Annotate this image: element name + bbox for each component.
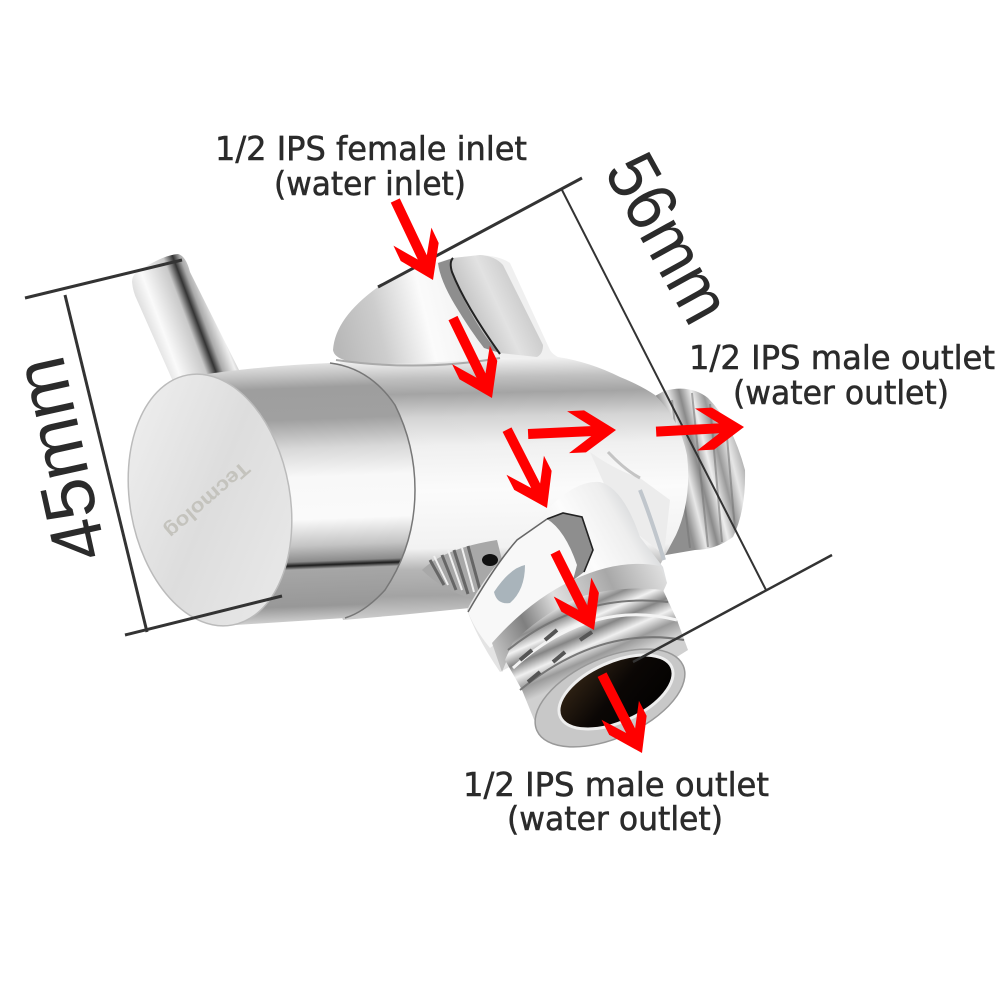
arrow: lower outlet: [583, 665, 661, 763]
arrow: right outlet: [655, 406, 745, 453]
icon: rear small thread: [422, 540, 505, 600]
label: 45mm: 45mm: [0, 349, 123, 570]
label: right outlet: 1/2 IPS male outlet: [689, 338, 995, 377]
label: right outlet: [689, 338, 995, 412]
label: inlet: (water inlet): [274, 164, 466, 203]
arrow: toward right outlet: [527, 409, 617, 455]
label: lower outlet: 1/2 IPS male outlet: [463, 765, 769, 804]
icon: lower outlet thread: [505, 589, 688, 722]
label: inlet: 1/2 IPS female inlet: [215, 129, 527, 168]
icon: lower outlet neck: [467, 482, 667, 672]
label: lower outlet: (water outlet): [507, 799, 723, 838]
red flow arrows: [376, 191, 745, 763]
icon: end cap face: [109, 361, 311, 639]
logo: Tecmolog: Tecmolog: [160, 457, 254, 542]
arrow: into body: [434, 309, 511, 407]
arrow: toward lower outlet: [488, 420, 566, 518]
dimension lines: 45mm: [25, 260, 282, 635]
icon: end cap cylinder: [200, 363, 415, 626]
icon: lower outlet mouth: [521, 629, 699, 767]
label: inlet: [215, 129, 527, 203]
icon: lower outlet flange: [492, 564, 667, 672]
arrow: lower neck: [536, 543, 613, 639]
icon: rear right thread: [655, 389, 745, 556]
icon: top knob: [333, 255, 560, 366]
arrow: inlet: [376, 191, 452, 289]
dimension lines: 56mm: [378, 178, 832, 662]
label: 56mm: 56mm: [589, 140, 747, 336]
icon: rear lever: [132, 254, 240, 386]
label: right outlet: (water outlet): [733, 373, 949, 412]
label: lower outlet: [463, 765, 769, 838]
icon: valve body: [300, 357, 688, 620]
